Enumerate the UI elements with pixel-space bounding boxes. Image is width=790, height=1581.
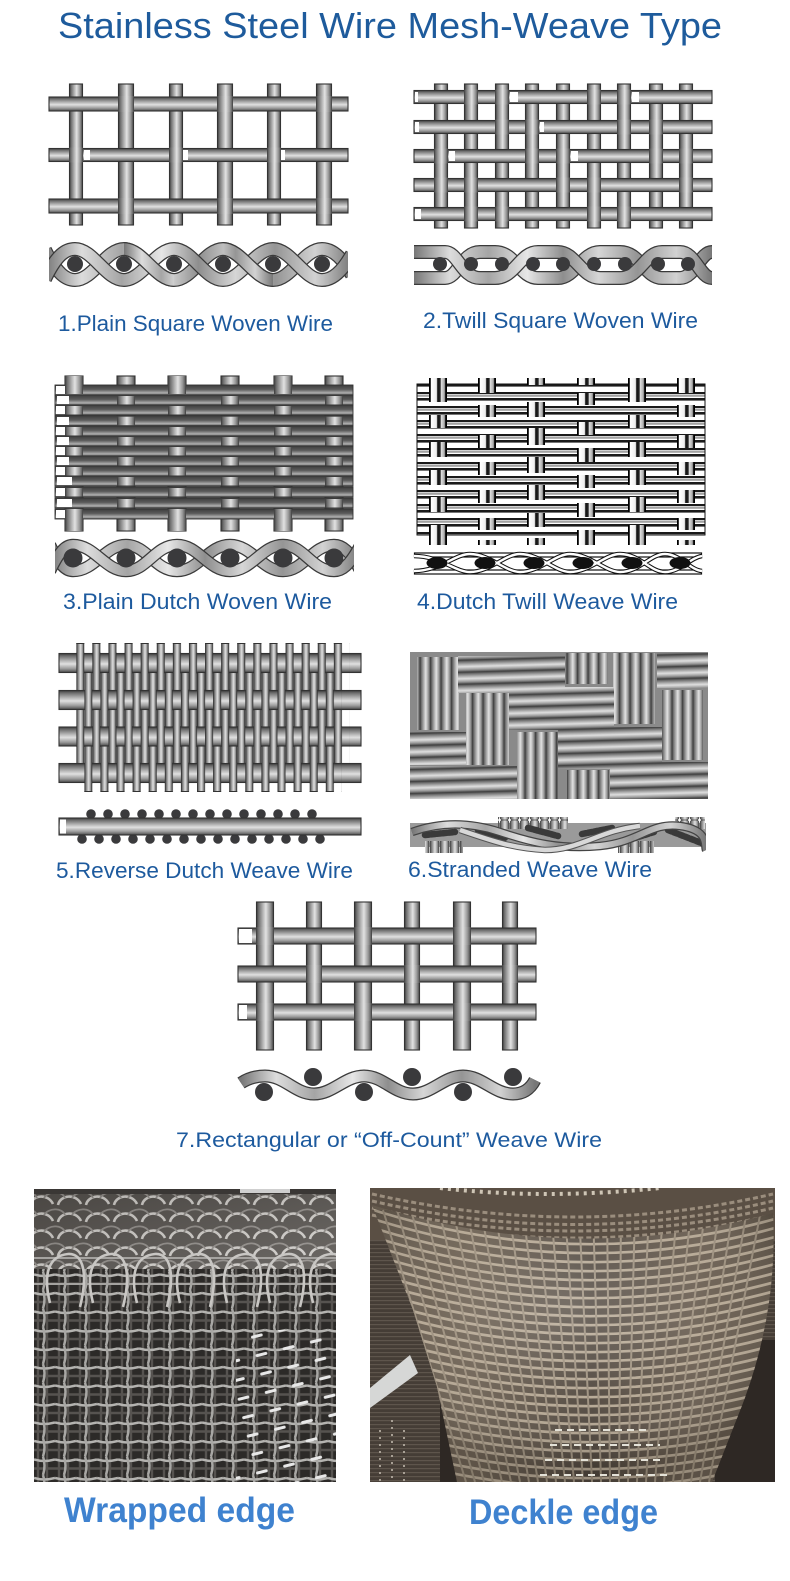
label: wrapped edge: Wrapped edge	[64, 1491, 295, 1530]
photo: wrapped edge mesh roll	[34, 1189, 347, 1482]
panel: plain square woven wire	[45, 84, 352, 336]
diagram: plain dutch cross-section	[50, 545, 360, 571]
diagram: rectangular weave pattern	[238, 902, 536, 1050]
caption 5: 5.Reverse Dutch Weave Wire	[56, 858, 353, 883]
label: deckle edge: Deckle edge	[469, 1493, 658, 1532]
mesh cone body	[372, 1206, 774, 1482]
diagram: twill weave cross-section	[414, 252, 712, 278]
diagram: plain square weave cross-section	[45, 249, 352, 280]
caption 6: 6.Stranded Weave Wire	[408, 857, 652, 882]
diagram: plain square weave pattern	[49, 84, 348, 225]
diagram: dutch twill cross-section	[414, 553, 702, 574]
photo: deckle edge mesh roll	[370, 1188, 775, 1505]
diagram: rectangular weave cross-section	[241, 1068, 535, 1101]
white strap	[370, 1355, 418, 1408]
caption 7: 7.Rectangular or “Off-Count” Weave Wire	[176, 1129, 602, 1152]
diagram: stranded weave cross-section	[410, 817, 706, 853]
diagram: reverse dutch weave pattern	[59, 643, 361, 792]
diagram: plain dutch weave pattern	[55, 376, 353, 531]
diagram: twill square weave pattern	[414, 84, 712, 228]
panel: reverse dutch weave wire	[56, 643, 361, 883]
diagram: reverse dutch cross-section	[59, 814, 361, 839]
panel: plain dutch woven wire	[50, 376, 360, 614]
caption 1: 1.Plain Square Woven Wire	[58, 311, 333, 336]
panel: rectangular off-count weave wire	[176, 902, 602, 1152]
panel: stranded weave wire	[408, 652, 708, 882]
caption 3: 3.Plain Dutch Woven Wire	[63, 589, 332, 614]
diagram: dutch twill weave pattern	[417, 378, 705, 545]
title: Stainless Steel Wire Mesh-Weave Type	[58, 5, 722, 46]
caption 2: 2.Twill Square Woven Wire	[423, 308, 698, 333]
panel: twill square woven wire	[414, 84, 712, 333]
caption 4: 4.Dutch Twill Weave Wire	[417, 589, 678, 614]
diagram: stranded weave basket pattern	[410, 652, 708, 799]
panel: dutch twill weave wire	[414, 378, 705, 614]
